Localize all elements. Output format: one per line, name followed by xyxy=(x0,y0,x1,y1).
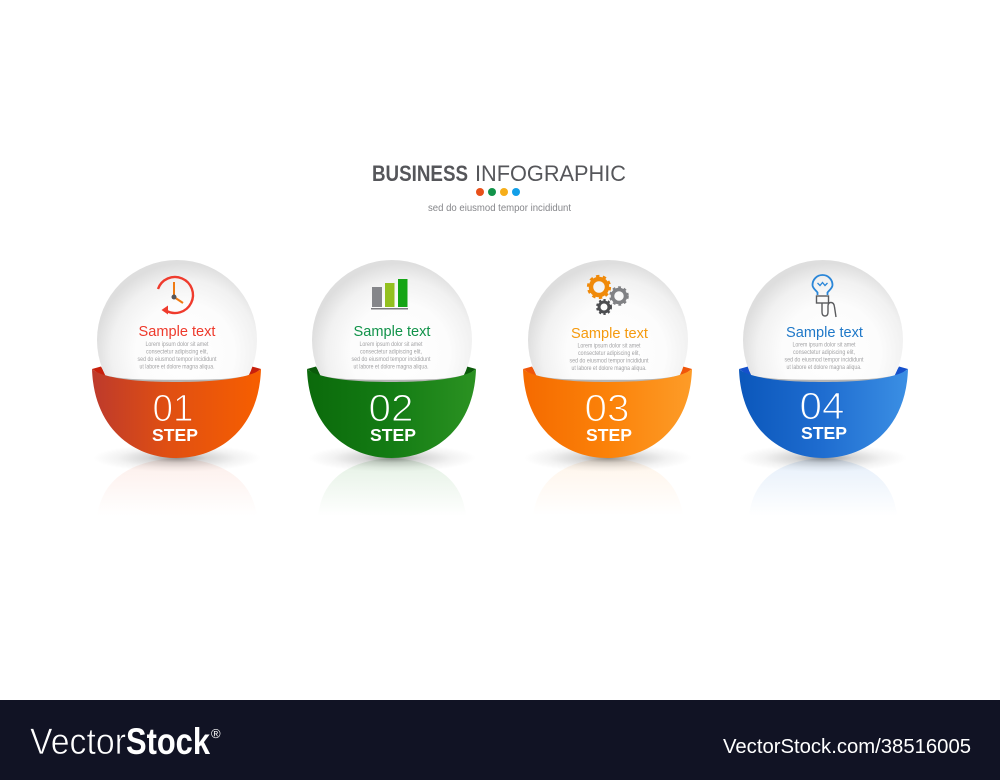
floor shadow 2 xyxy=(308,444,476,472)
colored dots xyxy=(476,188,520,196)
sphere 2 xyxy=(312,260,472,420)
body text 1: ut labore et dolore magna aliqua. xyxy=(140,364,215,370)
label 4: Sample text xyxy=(786,325,863,341)
step 1 xyxy=(92,260,261,516)
number 4: 04 xyxy=(800,386,844,428)
title xyxy=(372,161,626,186)
bowl 4 xyxy=(739,369,908,458)
rim shadow 3 xyxy=(538,377,677,381)
subtitle: sed do eiusmod tempor incididunt xyxy=(428,203,571,214)
body text 4: consectetur adipiscing elit, xyxy=(793,350,855,356)
sphere 3 xyxy=(528,260,688,420)
icon: bar chart xyxy=(371,279,408,310)
label 3: Sample text xyxy=(571,326,648,342)
body text 3: Lorem ipsum dolor sit amet xyxy=(578,344,641,350)
back rim 2 xyxy=(307,366,476,381)
body text 2: sed do eiusmod tempor incididunt xyxy=(352,357,431,363)
reflection 2 xyxy=(318,458,466,516)
image id: VectorStock.com/38516005 xyxy=(723,735,971,758)
rim shadow 4 xyxy=(754,377,893,381)
rim shadow 2 xyxy=(322,377,461,381)
number 2: 02 xyxy=(368,388,414,430)
title: INFOGRAPHIC xyxy=(475,161,626,186)
number 3: 03 xyxy=(584,388,630,430)
bowl 2 xyxy=(307,369,476,458)
icon: gears xyxy=(588,276,628,314)
reflection 4 xyxy=(749,458,897,516)
bowl 3 xyxy=(523,369,692,458)
body text 2: ut labore et dolore magna aliqua. xyxy=(354,364,429,370)
title: BUSINESS xyxy=(372,161,468,186)
floor shadow 4 xyxy=(739,444,907,472)
icon: clock xyxy=(158,277,193,314)
body text 4: sed do eiusmod tempor incididunt xyxy=(784,358,864,364)
back rim 4 xyxy=(739,366,908,381)
footer banner xyxy=(0,700,1000,780)
step 4 xyxy=(739,260,908,516)
back rim 3 xyxy=(523,366,692,381)
body text 2: consectetur adipiscing elit, xyxy=(360,350,422,356)
body text 1 xyxy=(138,342,217,370)
label 1: Sample text xyxy=(138,324,216,340)
registered mark: ® xyxy=(211,726,221,741)
body text 4: ut labore et dolore magna aliqua. xyxy=(786,365,862,371)
step label 1: STEP xyxy=(152,425,198,445)
label 2: Sample text xyxy=(354,324,430,340)
body text 2: Lorem ipsum dolor sit amet xyxy=(360,342,423,348)
sphere 4 xyxy=(743,260,903,420)
reflection 3 xyxy=(533,458,683,516)
floor shadow 3 xyxy=(524,444,692,472)
logo: Vector xyxy=(30,721,126,762)
body text 3: sed do eiusmod tempor incididunt xyxy=(570,358,649,364)
body text 3 xyxy=(570,344,649,372)
step label 4: STEP xyxy=(801,423,847,443)
step label 2: STEP xyxy=(370,425,416,445)
body text 4 xyxy=(784,342,864,371)
body text 3: consectetur adipiscing elit, xyxy=(578,351,640,357)
bowl 1 xyxy=(92,369,261,458)
body text 4: Lorem ipsum dolor sit amet xyxy=(792,342,856,348)
rim shadow 1 xyxy=(107,377,246,381)
reflection 1 xyxy=(97,458,257,516)
body text 2 xyxy=(352,342,431,370)
step 2 xyxy=(307,260,476,516)
logo bold part: Stock xyxy=(126,721,210,762)
number 1: 01 xyxy=(152,388,194,430)
floor shadow 1 xyxy=(93,444,261,472)
sphere 1 xyxy=(97,260,257,420)
icon: light bulb xyxy=(812,275,836,317)
step 3 xyxy=(523,260,692,516)
back rim 1 xyxy=(92,366,261,381)
body text 1: sed do eiusmod tempor incididunt xyxy=(138,357,217,363)
body text 3: ut labore et dolore magna aliqua. xyxy=(572,366,647,372)
step label 3: STEP xyxy=(586,425,632,445)
body text 1: consectetur adipiscing elit, xyxy=(146,350,208,356)
body text 1: Lorem ipsum dolor sit amet xyxy=(146,342,209,348)
